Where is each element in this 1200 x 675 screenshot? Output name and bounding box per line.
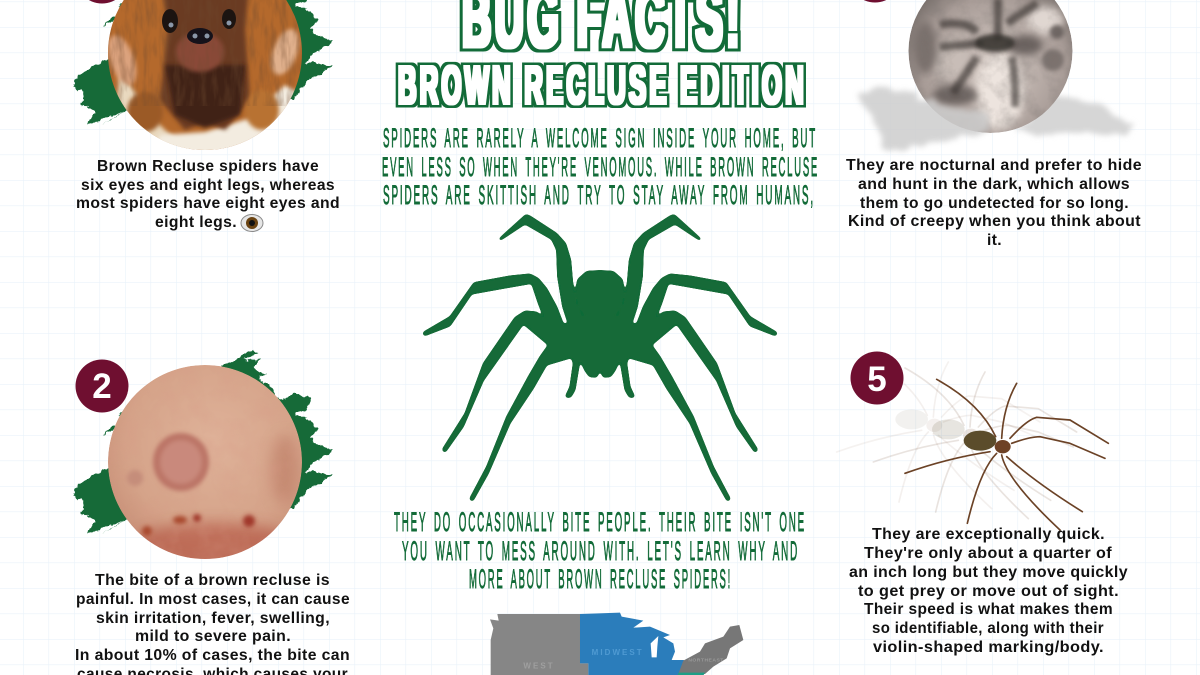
text: fact 2: The bite of a brown recluse is — [95, 572, 330, 589]
text: fact 5: to get prey or move out of sight. — [858, 583, 1119, 600]
photo: spider face — [108, 0, 302, 150]
photo: moon with spider shadow — [908, 0, 1073, 133]
photo: cloud behind moon — [1015, 95, 1134, 135]
photo: skin bite — [108, 365, 302, 567]
icon: green paint splat — [73, 348, 333, 534]
text: fact 2 — [75, 572, 350, 675]
map of the United States regions — [490, 613, 743, 675]
text: fact 2: painful. In most cases, it can cause — [76, 591, 350, 608]
text: fact 5 — [849, 526, 1128, 656]
text: fact 5: Their speed is what makes them — [864, 601, 1113, 618]
intro text top — [382, 123, 819, 210]
photo: cloud in front of moon — [859, 88, 990, 150]
text: fact 4: them to go undetected for so long. — [860, 195, 1129, 212]
map of the United States regions: WEST — [523, 661, 553, 670]
text: fact 5: an inch long but they move quickly — [849, 564, 1128, 581]
panel: fact 5 speed — [837, 352, 1128, 656]
badge 5 — [850, 352, 904, 404]
panel: fact 2 bite — [73, 348, 350, 675]
text: fact 5: so identifiable, along with their — [872, 620, 1104, 637]
text: fact 4 — [846, 157, 1142, 249]
title: Bug Facts — [398, 0, 807, 116]
text: fact 1: Brown Recluse spiders have — [97, 158, 319, 175]
text: fact 1 — [76, 158, 340, 231]
icon: green paint splat — [73, 0, 333, 125]
text: fact 4: Kind of creepy when you think about — [848, 213, 1141, 230]
text: fact 4: and hunt in the dark, which allows — [858, 176, 1130, 193]
text: fact 1: most spiders have eight eyes and — [76, 195, 340, 212]
badge 4 — [848, 0, 902, 2]
text: fact 5: They're only about a quarter of — [864, 545, 1112, 562]
icon: green spider silhouette — [423, 214, 777, 501]
badge 5: 5 — [867, 360, 887, 399]
text: fact 1: eight legs. — [155, 214, 237, 231]
text: fact 4: They are nocturnal and prefer to hide — [846, 157, 1142, 174]
badge 1 — [76, 0, 128, 4]
text: fact 2: In about 10% of cases, the bite can — [75, 647, 350, 664]
intro text bottom — [394, 507, 806, 594]
panel: fact 4 nocturnal — [846, 0, 1142, 249]
text: fact 4: it. — [987, 232, 1002, 249]
text: fact 2: skin irritation, fever, swelling, — [96, 610, 330, 627]
panel: fact 1 six eyes — [73, 0, 340, 232]
text: fact 2: mild to severe pain. — [135, 628, 291, 645]
text: fact 5: violin-shaped marking/body. — [873, 639, 1104, 656]
badge 2 — [76, 360, 128, 412]
icon: eye — [241, 214, 263, 232]
badge 2: 2 — [92, 367, 112, 406]
text: fact 5: They are exceptionally quick. — [872, 526, 1105, 543]
text: MORE ABOUT BROWN RECLUSE SPIDERS! — [469, 564, 732, 594]
text: fact 1: six eyes and eight legs, whereas — [81, 177, 335, 194]
map of the United States regions: MIDWEST — [592, 648, 642, 657]
photo: brown recluse running — [837, 358, 1108, 530]
map of the United States regions: NORTHEAST — [688, 657, 723, 663]
